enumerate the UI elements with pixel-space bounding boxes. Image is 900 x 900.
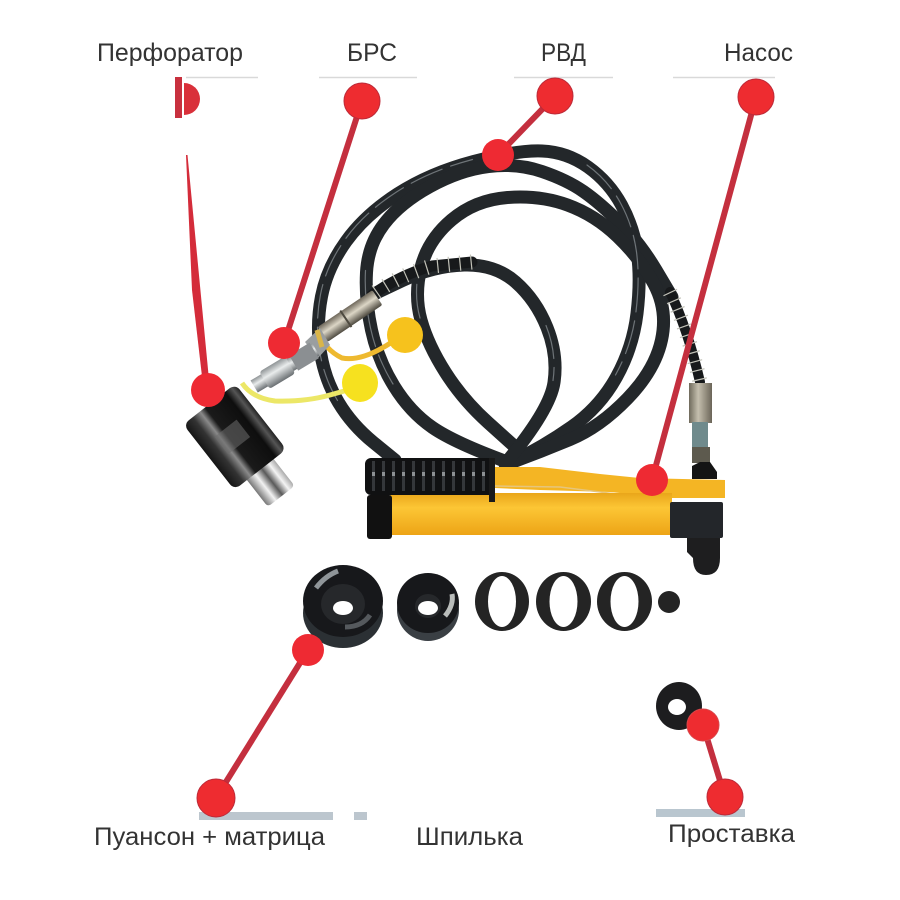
- label: Шпилька: Шпилька: [416, 823, 523, 851]
- label: Пуансон + матрица: Пуансон + матрица: [94, 823, 325, 851]
- left end cap: [367, 495, 392, 539]
- callout leader: [703, 725, 725, 797]
- perforator cylinder: [183, 384, 307, 517]
- spring coils: connector end: [376, 262, 472, 292]
- callout half disc: [184, 83, 200, 115]
- grip rib highlights: [372, 472, 488, 476]
- spring guard: connector end: [372, 262, 472, 295]
- callout leader: [652, 97, 756, 480]
- callout: БРС: [268, 83, 380, 359]
- spacer underline bar: [656, 809, 745, 817]
- spring coils: pump end: [670, 292, 700, 382]
- callout: Перфоратор: [175, 77, 225, 407]
- callout bottom dot: [482, 139, 514, 171]
- callout leader: [186, 155, 210, 385]
- callout leader: [498, 96, 555, 155]
- callout top dot: [687, 709, 719, 741]
- hydraulic hose coil: [317, 151, 700, 464]
- spacer ring 3: [597, 572, 652, 631]
- callout dot: [191, 373, 225, 407]
- fitting neck: [692, 422, 708, 448]
- callout: РВД: [482, 78, 573, 171]
- callout bottom dot: [636, 464, 668, 496]
- callout top dot: [738, 79, 774, 115]
- hose strand: pump side loop: [366, 165, 672, 463]
- hose strand: spring loop: [372, 265, 555, 464]
- fitting nut: [692, 447, 710, 463]
- heading: Насос: Насос: [724, 39, 793, 67]
- cylinder: [390, 493, 672, 535]
- yellow cap: upper: [387, 317, 423, 353]
- callout leader: [284, 101, 362, 343]
- callout top dot: [537, 78, 573, 114]
- heading: РВД: РВД: [541, 39, 586, 67]
- piston rod: [244, 456, 295, 507]
- fitting sleeve: [689, 383, 712, 423]
- callout: Насос: [636, 79, 774, 496]
- coupling body: [249, 341, 321, 395]
- spacer ring 2: [536, 572, 591, 631]
- hydraulic hand pump: [365, 458, 725, 575]
- strap ring: [317, 330, 322, 347]
- hose printed highlights: [317, 160, 638, 400]
- callout: Пуансон + матрица: [197, 634, 324, 817]
- grip collar: [489, 458, 495, 502]
- callout bottom dot: [197, 779, 235, 817]
- label: Проставка: Проставка: [668, 820, 795, 848]
- release knob: [687, 538, 720, 575]
- small stud end: [658, 591, 680, 613]
- quick coupling БРС: [249, 328, 330, 395]
- callout top dot: [344, 83, 380, 119]
- yellow cap: lower: [342, 364, 378, 402]
- rubber grip: [365, 458, 495, 495]
- lever crease: [495, 486, 640, 497]
- callout bottom dot: [268, 327, 300, 359]
- yellow cap strap: upper: [317, 330, 392, 359]
- right valve block: [670, 502, 723, 538]
- coupling joint: [305, 328, 330, 358]
- cylinder body: [183, 384, 286, 490]
- pump fitting base: [692, 462, 717, 479]
- hose strand: outer loop: [318, 151, 639, 463]
- heading: Перфоратор: Перфоратор: [97, 39, 243, 67]
- body engraving: [215, 420, 250, 454]
- callout: Проставка: [687, 709, 743, 815]
- pump hose fitting: [689, 383, 712, 463]
- heading: БРС: БРС: [347, 39, 397, 67]
- spring guard: pump end: [670, 292, 700, 382]
- hose fitting: metal sleeve: [317, 289, 383, 343]
- spacer ring 1: [475, 572, 529, 631]
- callout top dot: [292, 634, 324, 666]
- die 1: punch and die set: [303, 565, 383, 648]
- callout leader: [216, 650, 308, 798]
- grip ribs: [372, 461, 488, 491]
- spacer washer: [656, 682, 702, 730]
- hose strand: inner loop: [418, 197, 664, 463]
- die 2: [397, 573, 459, 641]
- callout stub: [175, 77, 182, 118]
- callout bottom dot: [707, 779, 743, 815]
- label underline bars: [199, 812, 367, 820]
- lever: [495, 467, 725, 498]
- yellow cap strap: lower: [242, 383, 355, 401]
